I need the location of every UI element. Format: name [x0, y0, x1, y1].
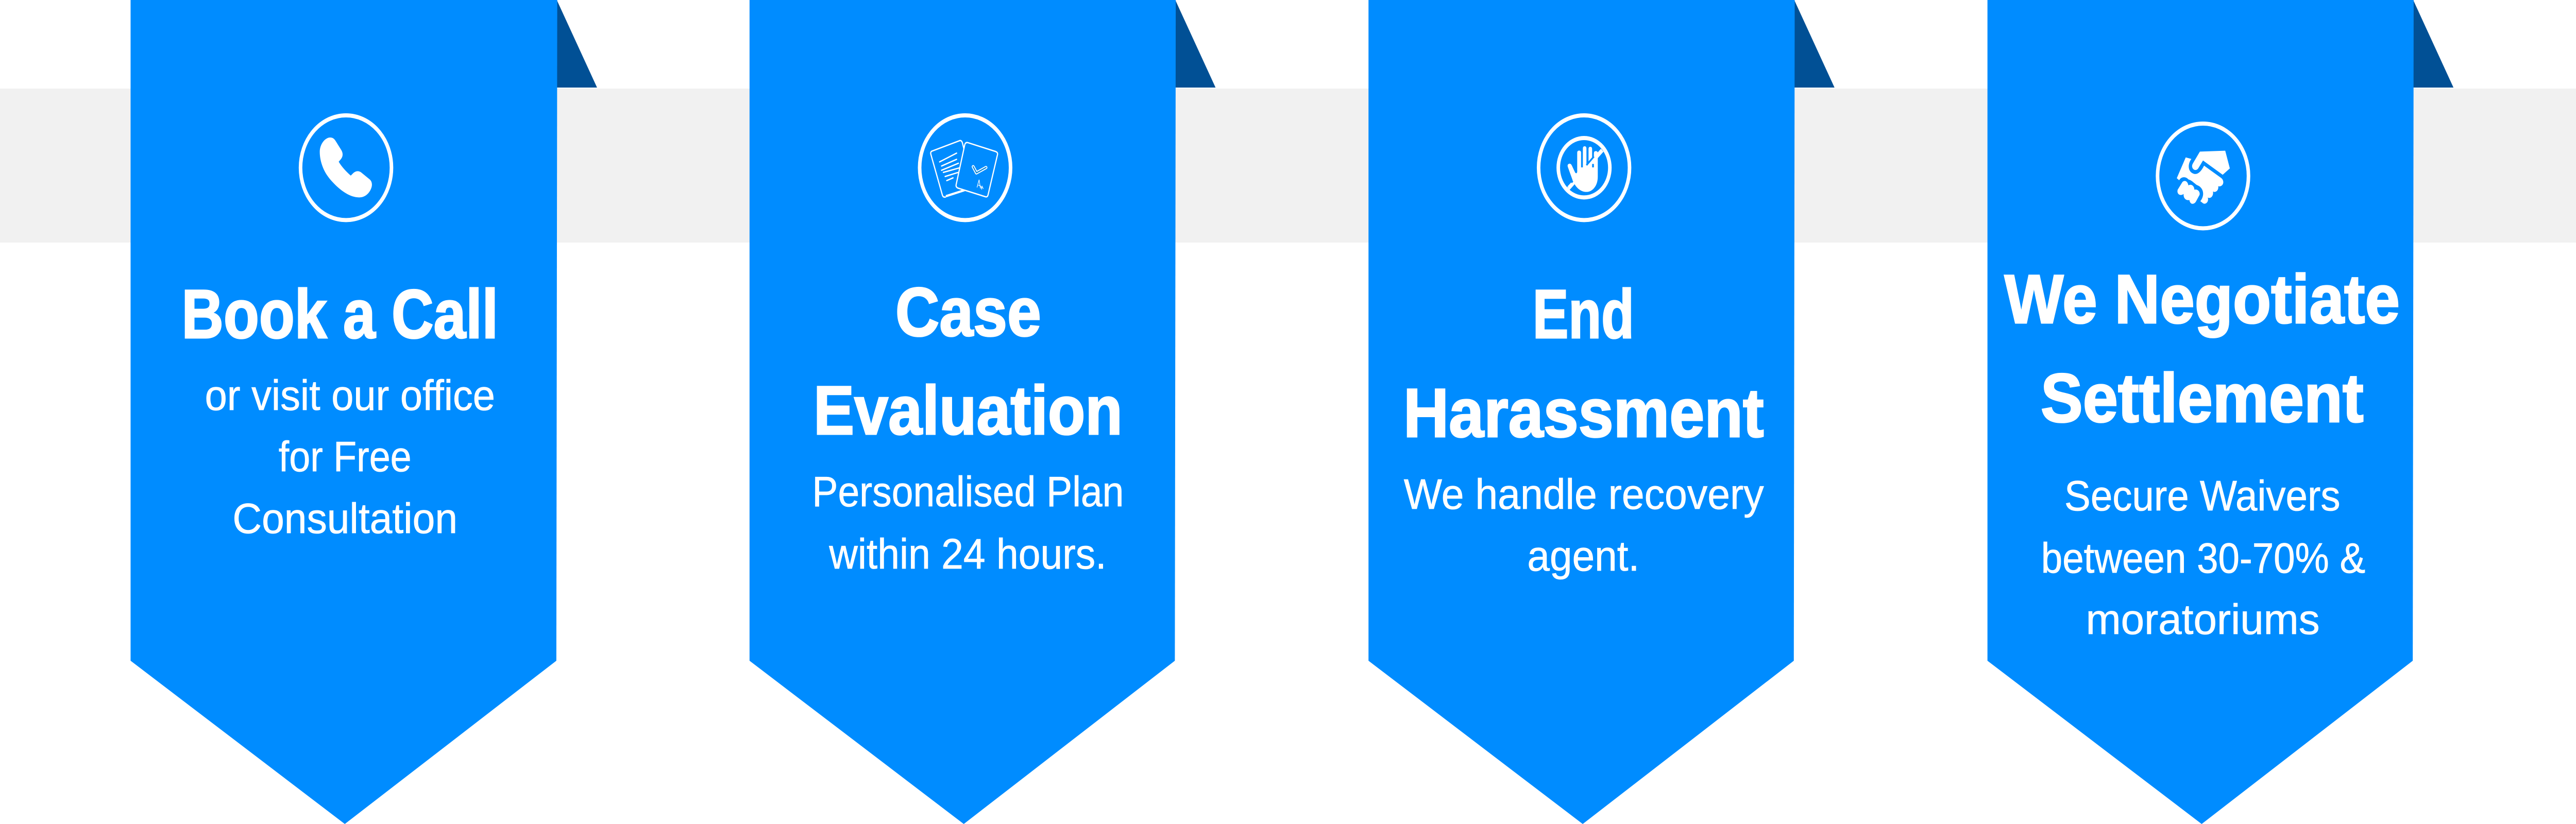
- description: between 30-70% &: [2041, 535, 2365, 582]
- description: [812, 468, 1124, 578]
- ribbon body: [1368, 0, 1795, 824]
- ribbon fold: [1794, 0, 1835, 88]
- heading: Evaluation: [814, 371, 1123, 449]
- description: [2041, 472, 2365, 643]
- description: for Free: [279, 433, 412, 480]
- description: We handle recovery: [1404, 471, 1764, 518]
- heading: Case: [895, 273, 1041, 351]
- heading: [2005, 260, 2400, 437]
- icon: stop hand: [1538, 115, 1630, 220]
- ribbon body: [750, 0, 1176, 824]
- icon: phone: [300, 115, 392, 220]
- description: or visit our office: [205, 372, 495, 419]
- description: [205, 372, 495, 542]
- heading: Harassment: [1403, 374, 1764, 452]
- description: Consultation: [232, 495, 457, 542]
- panel: End Harassment: [1368, 0, 1835, 824]
- ribbon fold: [2413, 0, 2453, 88]
- heading: End: [1533, 275, 1634, 353]
- heading: We Negotiate: [2005, 260, 2400, 338]
- panel: Case Evaluation: [750, 0, 1215, 824]
- panel: We Negotiate Settlement: [1988, 0, 2453, 824]
- description: within 24 hours.: [828, 530, 1107, 578]
- description: Secure Waivers: [2064, 472, 2341, 520]
- ribbon body: [1988, 0, 2414, 824]
- icon: handshake: [2158, 124, 2248, 228]
- description: agent.: [1527, 533, 1639, 580]
- heading: Settlement: [2041, 359, 2364, 437]
- icon: documents: [920, 115, 1011, 220]
- heading: [814, 273, 1123, 449]
- panel: Book a Call: [130, 0, 597, 824]
- background grey band: [0, 89, 2576, 243]
- ribbon body: [130, 0, 557, 824]
- ribbon fold: [1175, 0, 1215, 88]
- ribbon fold: [557, 0, 597, 88]
- description: Personalised Plan: [812, 468, 1124, 516]
- heading: Book a Call: [181, 275, 498, 353]
- description: [1404, 471, 1764, 580]
- description: moratoriums: [2086, 596, 2320, 643]
- heading: [1403, 275, 1764, 452]
